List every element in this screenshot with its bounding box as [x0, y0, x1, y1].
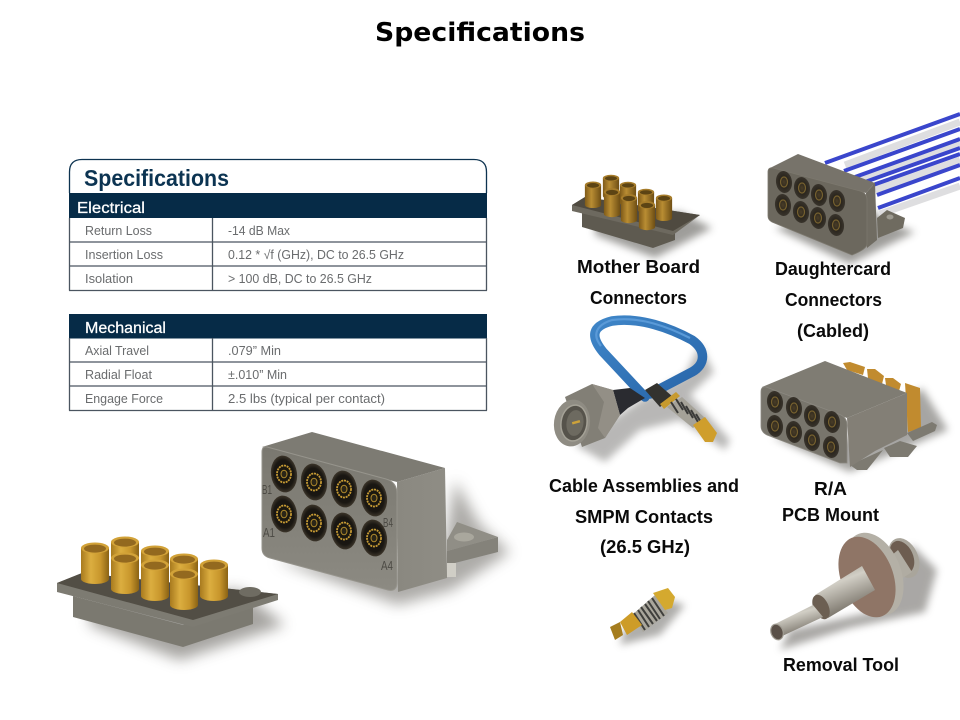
electrical header [69, 193, 487, 218]
panel: specifications table [69, 160, 487, 410]
row: isolation [85, 272, 372, 286]
label: cable assemblies and SMPM contacts: SMPM Contacts [575, 507, 713, 527]
label: cable assemblies and SMPM contacts: (26.5 GHz) [600, 537, 690, 557]
table heading: Specifications [84, 165, 229, 191]
tool shaft [769, 566, 875, 642]
row: radial float: Radial Float [85, 368, 153, 382]
label: mother board connectors [577, 257, 700, 308]
blue cable loop [595, 320, 702, 397]
position markings: B4 [383, 515, 393, 530]
mounting flange [850, 422, 937, 470]
rear flange [880, 533, 926, 585]
image: cable assembly [551, 319, 730, 462]
row: isolation: > 100 dB, DC to 26.5 GHz [228, 272, 372, 286]
SMA plug [551, 384, 645, 449]
sockets [269, 454, 389, 558]
mechanical header [69, 314, 487, 338]
mechanical grid [69, 338, 487, 410]
position markings: B1 [262, 482, 272, 497]
image: cabled daughtercard connector [768, 114, 960, 264]
label: mother board connectors: Connectors [590, 288, 687, 308]
sockets [774, 170, 846, 237]
label: removal tool: Removal Tool [783, 655, 899, 675]
label: daughtercard connectors cabled: Connectors [785, 290, 882, 310]
row: engage force [85, 392, 385, 406]
row: radial float: ±.010” Min [228, 368, 287, 382]
label: daughtercard connectors cabled: Daughtercard [775, 259, 891, 279]
label: R/A PCB mount: R/A [814, 479, 847, 499]
disc [828, 524, 915, 626]
row: return loss: -14 dB Max [228, 224, 291, 238]
row: axial travel [85, 344, 281, 358]
row: radial float [85, 368, 287, 382]
position markings: A1 [263, 525, 275, 540]
gold barrels [81, 536, 228, 610]
table heading frame [70, 160, 486, 193]
image: large daughtercard connector [262, 432, 510, 605]
gold barrels [585, 175, 672, 230]
label: R/A PCB mount [782, 479, 879, 525]
gold pins [843, 362, 921, 432]
row: axial travel: .079” Min [228, 344, 281, 358]
row: isolation: Isolation [85, 272, 133, 286]
image: right angle PCB mount connector [761, 361, 948, 472]
row: insertion loss [85, 248, 404, 262]
cable bundle [825, 114, 960, 214]
mounting flange [877, 210, 905, 238]
label: daughtercard connectors cabled: (Cabled) [797, 321, 869, 341]
mounting flange [447, 522, 498, 577]
label: daughtercard connectors cabled [775, 259, 891, 341]
row: return loss [85, 224, 291, 238]
image: small mother board connector [572, 175, 712, 258]
mechanical table [69, 314, 487, 410]
row: insertion loss: Insertion Loss [85, 248, 163, 262]
label: R/A PCB mount: PCB Mount [782, 505, 879, 525]
sockets [766, 390, 841, 459]
row: engage force: 2.5 lbs (typical per contact) [228, 392, 385, 406]
image: large mother board connector [57, 536, 285, 660]
mechanical header text: Mechanical [85, 320, 166, 337]
label: mother board connectors: Mother Board [577, 257, 700, 277]
image: SMPM contact [610, 588, 685, 645]
position markings: A4 [381, 558, 393, 573]
image: removal tool [769, 524, 937, 650]
label: cable assemblies and SMPM contacts [549, 476, 739, 557]
row: engage force: Engage Force [85, 392, 163, 406]
position markings [262, 482, 393, 573]
row: return loss: Return Loss [85, 224, 152, 238]
electrical header text: Electrical [77, 200, 145, 217]
label: cable assemblies and SMPM contacts: Cable Assemblies and [549, 476, 739, 496]
row: axial travel: Axial Travel [85, 344, 149, 358]
title: Specifications [375, 18, 585, 48]
row: insertion loss: 0.12 * √f (GHz), DC to 26.5 GHz [228, 248, 404, 262]
SMPM contact on cable end [645, 383, 717, 442]
electrical table [69, 193, 487, 290]
electrical grid [69, 218, 487, 290]
